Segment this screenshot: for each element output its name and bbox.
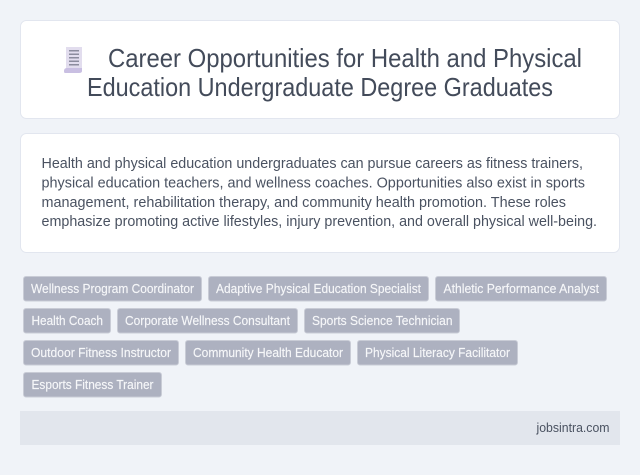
tag: Health Coach: Health Coach	[32, 313, 103, 328]
tag: Outdoor Fitness Instructor: Outdoor Fitness Instructor	[31, 345, 172, 360]
description text: physical education teachers, and wellness coaches. Opportunities also exist in sports	[42, 174, 585, 192]
footer source text: jobsintra.com	[536, 420, 610, 435]
tag: Wellness Program Coordinator: Wellness Program Coordinator	[31, 281, 195, 296]
panel: description card	[20, 134, 620, 252]
description text	[42, 155, 597, 230]
tag: Esports Fitness Trainer	[24, 372, 162, 397]
tag: Physical Literacy Facilitator: Physical Literacy Facilitator	[365, 345, 511, 360]
tag: Esports Fitness Trainer: Esports Fitness Trainer	[32, 377, 154, 392]
tag: Health Coach	[24, 308, 110, 333]
description text: emphasize promoting active lifestyles, injury prevention, and overall physical well-being.	[42, 213, 597, 230]
tag: Athletic Performance Analyst	[436, 276, 606, 301]
tag: Wellness Program Coordinator	[24, 276, 202, 301]
tag: Adaptive Physical Education Specialist: Adaptive Physical Education Specialist	[216, 281, 421, 296]
footer bar	[20, 411, 620, 445]
icon: document scroll	[64, 47, 82, 73]
tag: Outdoor Fitness Instructor	[24, 340, 178, 365]
career tags	[24, 276, 606, 397]
tag: Corporate Wellness Consultant	[118, 308, 298, 333]
tag: Physical Literacy Facilitator	[358, 340, 518, 365]
description text: management, rehabilitation therapy, and community health promotion. These roles	[42, 194, 566, 211]
title: Career Opportunities for Health and Physical	[108, 43, 582, 73]
tag: Sports Science Technician: Sports Science Technician	[312, 313, 452, 328]
tag: Corporate Wellness Consultant: Corporate Wellness Consultant	[125, 313, 290, 328]
tag: Sports Science Technician	[304, 308, 460, 333]
tag: Community Health Educator: Community Health Educator	[193, 345, 344, 360]
title: Education Undergraduate Degree Graduates	[87, 72, 553, 102]
tag: Community Health Educator	[186, 340, 350, 365]
title	[87, 43, 582, 102]
tag: Adaptive Physical Education Specialist	[208, 276, 428, 301]
tag: Athletic Performance Analyst: Athletic Performance Analyst	[444, 281, 599, 296]
description text: Health and physical education undergraduates can pursue careers as fitness trainers,	[42, 155, 583, 172]
panel: title card	[20, 20, 620, 118]
